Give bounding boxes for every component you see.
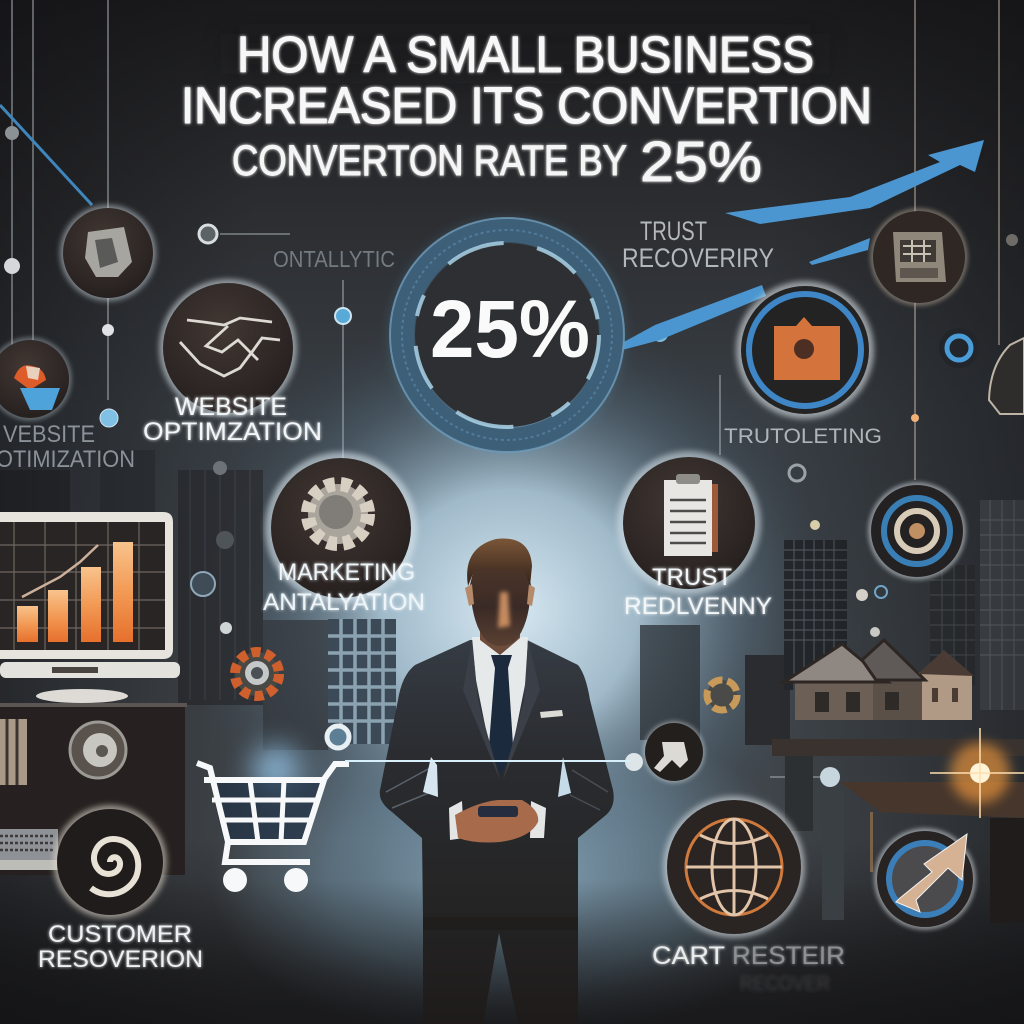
icon: blue target (868, 482, 966, 580)
central 25% ring: 25% (430, 284, 590, 375)
arm gap left (423, 757, 438, 797)
label: trust recovery (624, 564, 772, 620)
body (380, 640, 614, 1024)
label: trust recovery: TRUST (652, 564, 732, 591)
icon: small blue target (939, 328, 979, 368)
icon: metallic bell right edge (989, 338, 1024, 414)
title line 3 (232, 130, 762, 194)
label: customer recovery (38, 921, 203, 973)
title line 3: CONVERTON RATE BY (232, 137, 627, 185)
label: customer recovery: CUSTOMER (48, 921, 192, 948)
connector lines (12, 0, 999, 777)
label: faded website optimization: OTIMIZATION (0, 446, 135, 473)
label: website optimization: OPTIMZATION (143, 418, 322, 446)
label: cart restorer (652, 942, 845, 970)
label: marketing analyzation: MARKETING (278, 559, 415, 586)
light flare (930, 728, 1024, 818)
face (470, 560, 531, 646)
icon: globe (663, 796, 805, 938)
label: trust recovery: REDLVENNY (624, 593, 772, 620)
small label: trust recovery: RECOVERIRY (622, 243, 774, 273)
monitor bar chart (0, 512, 180, 703)
sleeve highlight right (570, 770, 608, 810)
trouser sheen (423, 917, 578, 930)
label: marketing analyzation (263, 559, 425, 616)
title line 1: HOW A SMALL BUSINESS (237, 26, 814, 83)
label: trust targeting: TRUTOLETING (724, 425, 882, 448)
pocket square (540, 710, 563, 718)
icon: screen left edge (0, 337, 72, 421)
cart glow (252, 746, 300, 794)
label: marketing analyzation: ANTALYATION (263, 589, 425, 616)
tie (489, 655, 513, 775)
label: customer recovery: RESOVERION (38, 946, 203, 973)
neck (480, 625, 520, 655)
person in suit (380, 539, 614, 1024)
arm gap right (558, 757, 571, 797)
label: cart restorer: RESTEIR (732, 942, 845, 970)
nose highlight (498, 592, 510, 628)
icon: clipboard trust recovery (617, 451, 761, 595)
hair (467, 539, 532, 586)
title line 2: INCREASED ITS CONVERTION (181, 77, 872, 134)
arrow: rising blue growth trend (622, 140, 984, 350)
cuffs (449, 801, 546, 840)
shirt (472, 637, 528, 745)
connector nodes (4, 126, 1018, 787)
icon: house top right (870, 208, 968, 306)
label: website optimization (143, 393, 322, 446)
icon: orange gear small (235, 652, 279, 696)
small label: trust recovery (622, 216, 774, 273)
ears (465, 584, 535, 606)
central 25% ring (390, 218, 624, 452)
small label: analytic: ONTALLYTIC (273, 246, 395, 272)
icon: orange ring small (707, 680, 737, 710)
desk left (0, 703, 187, 875)
sleeve highlight left (386, 768, 436, 808)
label: faded text under cart restorer: RECOVER (740, 973, 830, 995)
icon: shopping cart (197, 763, 349, 892)
arrow: top left blue trend (0, 105, 92, 205)
houses (784, 640, 974, 720)
label: website optimization: WEBSITE (175, 393, 287, 421)
icon: document top left (60, 205, 156, 301)
label: cart restorer: CART (652, 942, 725, 970)
city skyline left (0, 450, 396, 750)
icon: orange tag (736, 281, 874, 419)
desk right (772, 739, 1024, 923)
label: faded website optimization: VEBSITE (3, 421, 95, 448)
icon: handshake (159, 279, 297, 417)
title backdrop (230, 34, 820, 74)
icon: small ring above cart (327, 726, 349, 748)
horizontal connector line (345, 760, 630, 762)
small label: trust recovery: TRUST (640, 216, 707, 246)
phone (478, 806, 518, 817)
lapels (463, 640, 540, 780)
icon: spiral customer recovery (53, 805, 167, 919)
icon: arrow upturn (874, 828, 976, 930)
icon: dial left (70, 722, 126, 778)
icon: gear (265, 452, 417, 604)
city skyline right (640, 500, 1024, 745)
hands (455, 800, 538, 842)
label: faded website optimization (0, 421, 135, 473)
title line 3: 25% (640, 130, 762, 194)
icon: small dial center right (643, 721, 705, 783)
